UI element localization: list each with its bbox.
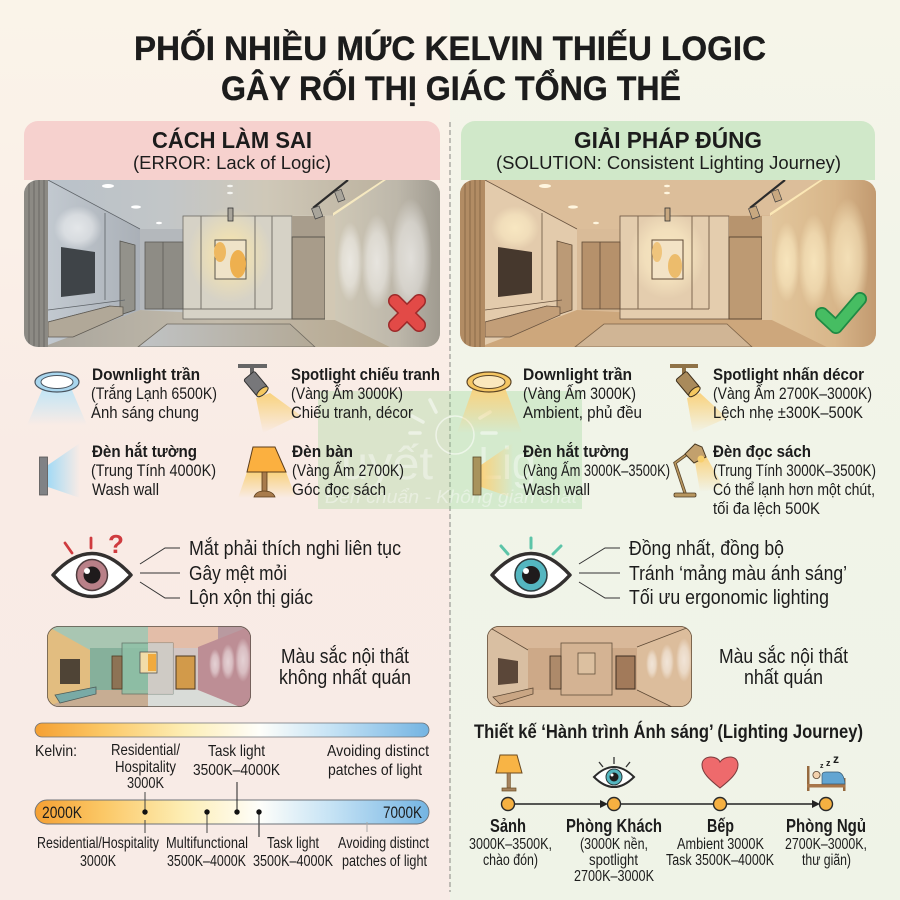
top labels: patches of light [328, 762, 422, 779]
text: downlight warm: (Vàng Ấm 3000K) [523, 384, 636, 403]
panel header: wrong way [24, 121, 440, 180]
text: accent spotlight [713, 365, 872, 422]
bottom labels: Avoiding distinct [338, 835, 430, 852]
text: benefits: Đồng nhất, đồng bộ [629, 537, 784, 560]
text: spotlight [291, 365, 440, 422]
text: wall washer: Đèn hắt tường [92, 442, 197, 461]
text: wall washer warm: (Vàng Ấm 3000K–3500K) [523, 461, 670, 480]
panel header: wrong way: (ERROR: Lack of Logic) [133, 152, 331, 173]
watermark: Lig [478, 437, 536, 489]
panel header: right way [461, 121, 875, 180]
stop: Bếp: Task 3500K–4000K [666, 852, 775, 869]
connector lines [579, 548, 620, 598]
top labels: Kelvin: [35, 743, 77, 760]
icon: eye [594, 757, 634, 787]
stop: Sảnh: 3000K–3500K, [469, 836, 552, 853]
icon: sleeping bed: z [820, 763, 824, 770]
stop: Sảnh [469, 816, 552, 869]
stop: Phòng Khách: Phòng Khách [566, 816, 662, 836]
small room: inconsistent colours [47, 626, 251, 707]
top labels: Avoiding distinct [327, 743, 429, 760]
text: wall washer: (Trung Tính 4000K) [91, 461, 216, 480]
bottom labels: Task light [267, 835, 320, 852]
stop: Phòng Ngủ: thư giãn) [802, 852, 851, 869]
eye section: right way [492, 537, 847, 609]
text: reading lamp [713, 442, 876, 518]
top labels: 3500K–4000K [193, 762, 280, 779]
timeline [502, 798, 832, 810]
icon: lamp [496, 755, 522, 791]
icon: table lamp [238, 447, 296, 498]
eye section: wrong way [53, 529, 401, 609]
bottom labels: 3000K [80, 853, 117, 870]
bottom labels: Multifunctional [166, 835, 248, 852]
text: accent spotlight: Spotlight nhấn décor [713, 365, 864, 384]
bar end labels: 7000K [383, 804, 422, 822]
text: wall washer warm: Đèn hắt tường [523, 442, 629, 461]
bottom labels: 3500K–4000K [167, 853, 247, 870]
text: table lamp: Góc đọc sách [292, 480, 386, 499]
top labels: Hospitality [115, 759, 176, 776]
bottom labels: patches of light [342, 853, 428, 870]
room illustration: right way, consistent light [460, 180, 876, 347]
watermark [318, 391, 582, 509]
stop: Phòng Ngủ: 2700K–3000K, [785, 836, 867, 853]
bottom labels [37, 835, 430, 870]
markers [145, 782, 367, 837]
icon: heart [702, 757, 738, 788]
text: downlight: Downlight trần [92, 365, 200, 384]
icon: cold downlight [27, 372, 87, 425]
top labels: 3000K [127, 775, 164, 792]
text: benefits: Tối ưu ergonomic lighting [629, 586, 829, 609]
text: consistent: Màu sắc nội thất [719, 645, 848, 668]
bottom labels: 3500K–4000K [253, 853, 334, 870]
text: table lamp [292, 442, 404, 499]
stop: Phòng Khách: 2700K–3000K [574, 868, 655, 885]
icon: red cross [395, 301, 419, 325]
text: benefits: Tránh ‘mảng màu ánh sáng’ [629, 562, 847, 585]
icon: accent spotlight [670, 364, 727, 433]
text: effects: Gây mệt mỏi [189, 562, 287, 585]
text: wall washer: Wash wall [92, 480, 159, 499]
stop: Phòng Ngủ [785, 816, 867, 869]
text: downlight warm: Ambient, phủ đều [523, 403, 642, 422]
icon: strained eye: ? [108, 529, 124, 559]
text: table lamp: (Vàng Ấm 2700K) [292, 461, 404, 480]
top labels [35, 742, 429, 792]
text: downlight warm: Downlight trần [523, 365, 632, 384]
stop: Bếp: Ambient 3000K [677, 836, 765, 853]
text: spotlight: Chiếu tranh, décor [291, 403, 413, 422]
lighting journey [469, 720, 867, 885]
title [134, 29, 766, 108]
icon: strained eye [53, 529, 131, 596]
top labels: Residential/ [111, 742, 180, 759]
icon: calm eye [492, 538, 570, 596]
small room: consistent colours [487, 626, 692, 707]
text: consistent [719, 645, 848, 689]
text: spotlight: Spotlight chiếu tranh [291, 365, 440, 384]
panel header: wrong way: CÁCH LÀM SAI [152, 126, 312, 153]
connector lines [140, 548, 180, 598]
lower gradient bar [35, 800, 429, 824]
panel header: right way: (SOLUTION: Consistent Lighting Journey) [496, 152, 841, 173]
icon: neutral wall washer [40, 443, 80, 498]
stop: Phòng Khách: (3000K nền, [580, 836, 648, 853]
icon: warm wall washer [473, 443, 513, 498]
fixture list: wrong way [27, 364, 440, 499]
text: effects: Mắt phải thích nghi liên tục [189, 537, 401, 560]
stop: Phòng Ngủ: Phòng Ngủ [786, 816, 866, 836]
bottom labels: Residential/Hospitality [37, 835, 159, 852]
text: inconsistent: Màu sắc nội thất [281, 645, 409, 668]
icon: green check [822, 299, 860, 327]
fixture list: right way [457, 364, 876, 518]
text: benefits [629, 537, 847, 609]
kelvin scale [35, 723, 430, 870]
icon: sleeping bed: z [826, 758, 831, 768]
watermark: Đèn chuẩn - Không gian chất [325, 487, 578, 507]
text: wall washer warm [523, 442, 670, 499]
text: accent spotlight: Lệch nhẹ ±300K–500K [713, 403, 864, 422]
text: wall washer [91, 442, 216, 499]
text: downlight: (Trắng Lạnh 6500K) [91, 384, 217, 403]
text: inconsistent: không nhất quán [279, 666, 411, 689]
text: effects [189, 537, 401, 609]
stop: Sảnh: chào đón) [483, 852, 538, 869]
bar end labels: 2000K [42, 804, 82, 822]
text: spotlight: (Vàng Ấm 3000K) [291, 384, 403, 403]
text: inconsistent [279, 645, 411, 689]
text: downlight [91, 365, 217, 422]
watermark: uyết [341, 437, 433, 489]
text: effects: Lộn xộn thị giác [189, 586, 313, 609]
text: consistent: nhất quán [744, 666, 823, 689]
top gradient bar [35, 723, 429, 737]
title: GÂY RỐI THỊ GIÁC TỔNG THỂ [221, 69, 681, 108]
text: reading lamp: tối đa lệch 500K [713, 499, 821, 518]
text: wall washer warm: Wash wall [523, 480, 590, 499]
icon: warm spotlight [238, 364, 300, 433]
stop: Phòng Khách: spotlight [589, 852, 639, 869]
panel header: right way: GIẢI PHÁP ĐÚNG [574, 125, 762, 153]
room illustration: wrong way, mixed light [24, 180, 440, 347]
text: table lamp: Đèn bàn [292, 442, 353, 461]
icon: sleeping bed: z [833, 752, 839, 766]
stop: Phòng Khách [566, 816, 662, 885]
icon: reading lamp [674, 444, 724, 497]
stop: Sảnh: Sảnh [490, 816, 526, 836]
text: reading lamp: Đèn đọc sách [713, 442, 811, 461]
icon: sleeping bed [807, 752, 846, 791]
text: downlight warm [523, 365, 642, 422]
title: PHỐI NHIỀU MỨC KELVIN THIẾU LOGIC [134, 29, 766, 68]
stop: Bếp: Bếp [707, 816, 734, 836]
icon: warm downlight [457, 372, 522, 433]
stop: Bếp [666, 816, 775, 869]
top labels: Task light [208, 743, 265, 760]
text: downlight: Ánh sáng chung [91, 403, 199, 422]
bar end labels [42, 804, 422, 822]
